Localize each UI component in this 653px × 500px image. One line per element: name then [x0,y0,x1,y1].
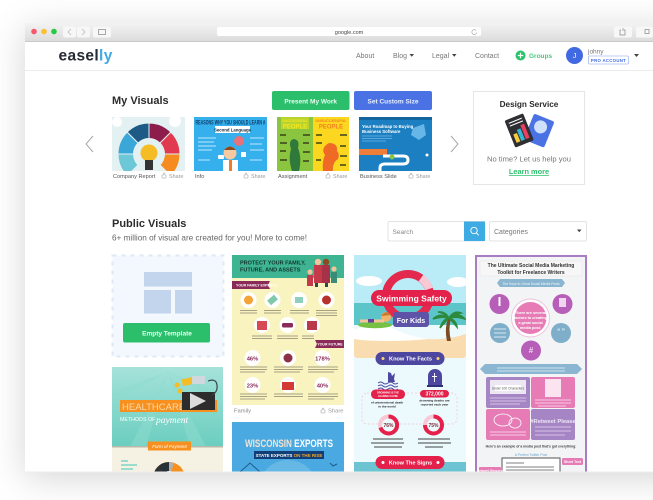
card: Family: 23% [247,384,258,390]
card: Empty Template: Empty Template [142,330,192,338]
card: Healthcare: HEALTHCARE [122,402,185,413]
subtitle: 6+ million of visual are created for you! More to come! [112,234,307,242]
button: Set Custom Size [354,91,432,110]
icon: design cards [504,113,555,148]
thumbnail: Info: Info [195,174,204,180]
search box: Search [392,229,413,236]
panel: Design Service [474,92,584,184]
card: Social Media Marketing Toolkit: Here's an example of a media post that's got everything: [486,444,576,448]
navigation bar [25,42,653,71]
card: Social Media Marketing Toolkit [475,255,587,478]
logo: easelly [58,48,113,64]
navigation bar: PRO ACCOUNT [591,58,626,63]
thumbnail: Assignment [277,117,349,180]
swimmer [358,312,392,328]
arrow: carousel left [86,136,93,152]
thumbnail: Assignment: PEOPLE [319,124,343,130]
card: Social Media Marketing Toolkit: Short Text [564,460,582,464]
navigation bar: J [573,53,576,60]
card: Social Media Marketing Toolkit: Retweet Request [477,469,504,473]
card: Family: Share [328,408,343,414]
card: Family: YOUR FAMILY EXPERTS [236,284,278,288]
card: Healthcare: METHODS OF [120,417,156,423]
card: Swimming Safety: 75% [428,423,439,429]
card: Social Media Marketing Toolkit: A Perfect Twitter Post [515,453,547,457]
card: Empty Template [112,256,224,356]
card: Swimming Safety: LEADING CAUSE [378,395,398,398]
thumbnail: Assignment: UNSUCCESSFUL [315,119,347,123]
card: Family: 46% [247,356,258,362]
card: Social Media Marketing Toolkit: #Retweet Please [530,419,576,425]
card: Swimming Safety: For Kids [397,318,425,325]
card: Wisconsin Exports: WISCONSIN EXPORTS [245,438,333,450]
card: Family [232,255,344,414]
card: Social Media Marketing Toolkit: Under 100 Characters [492,387,525,391]
card: Social Media Marketing Toolkit: media post: [520,326,541,330]
card: Swimming Safety: in the world [378,404,396,408]
card: Family: FUTURE, AND ASSETS [240,268,301,274]
thumbnail: Business Slide: Business Slide [360,174,397,180]
categories dropdown [490,222,586,241]
thumbnail: Info [194,117,267,180]
thumbnail: Assignment: SUCCESSFUL [282,119,309,123]
thumbnail: Company Report [112,115,185,180]
card: Wisconsin Exports: STATE EXPORTS ON THE RISE [256,453,322,458]
card: Swimming Safety: Swimming Safety [376,294,447,304]
heading: My Visuals: My Visuals [112,95,169,107]
arrow: carousel right [451,136,458,152]
card: Family: Family [234,408,251,414]
card: Social Media Marketing Toolkit: The Keys to Great Social Media Posts [502,282,560,286]
search box [388,222,485,241]
card: Social Media Marketing Toolkit: The Ultimate Social Media Marketing [488,263,574,269]
navigation bar: About [356,53,374,60]
thumbnail: Info: REASONS WHY YOU SHOULD LEARN A [196,120,266,126]
card: Healthcare: payment [155,416,189,426]
thumbnail: Company Report: Company Report [113,174,156,180]
navigation bar: Groups [529,53,552,60]
thumbnail: Business Slide: Share [416,174,430,180]
browser title bar: google.com [335,30,364,36]
navigation bar: Blog [393,53,407,60]
thumbnail: Info: Second Language [214,128,252,132]
thumbnail: Business Slide: Business Software [362,129,401,134]
card: Swimming Safety: 372,000 [425,392,444,398]
card: Healthcare [112,367,223,472]
card: Swimming Safety: Know The Signs [389,461,432,467]
card: Social Media Marketing Toolkit: There are several [515,311,546,315]
thumbnail: Business Slide: Your Roadmap to Buying [362,124,414,129]
card: Swimming Safety [354,255,469,472]
palm tree [433,312,465,341]
card: Swimming Safety: reported each year [421,402,449,406]
heading: Public Visuals: Public Visuals [112,218,186,230]
card: Swimming Safety: DROWNING IS THE [377,392,399,395]
family illustration [307,259,337,287]
browser title bar [25,23,653,42]
panel: Design Service: Learn more [509,167,549,176]
button: Present My Work [272,91,350,110]
thumbnail: Info: Share [251,174,265,180]
card: Swimming Safety: Know The Facts [389,357,432,363]
navigation bar: johny [587,48,604,56]
thumbnail: Business Slide [359,117,432,180]
thumbnail: Assignment: Assignment [278,174,308,180]
card: Family: 178% [315,356,330,362]
panel: Design Service: No time? Let us help you [487,154,571,164]
card: Family: PROTECT YOUR FAMILY, [240,260,306,266]
card: Family: YOUR FUTURE [317,342,343,346]
card: Family: 40% [317,384,328,390]
navigation bar: Legal [432,53,450,60]
life ring [386,274,430,318]
card: Swimming Safety: drowning deaths are [419,398,450,402]
thumbnail: Assignment: Share [333,174,347,180]
button: Present My Work: Present My Work [284,98,337,105]
card: Social Media Marketing Toolkit: Toolkit for Freelance Writers [497,270,565,276]
card: Wisconsin Exports [232,422,344,472]
card: Swimming Safety: 76% [383,423,394,429]
thumbnail: Company Report: Share [169,174,183,180]
card: Swimming Safety: of unintentional death [371,400,403,404]
window bottom edge [25,472,653,473]
button: Set Custom Size: Set Custom Size [368,98,419,105]
categories dropdown: Categories [494,229,528,236]
card: Social Media Marketing Toolkit: # [529,346,534,355]
card: Social Media Marketing Toolkit: factors to creating [514,316,548,320]
thumbnail: Assignment: PEOPLE [283,124,307,130]
panel: Design Service: Design Service [500,100,559,109]
card: Healthcare: Form of Payment [152,444,188,449]
navigation bar: Contact [475,53,499,60]
card: Social Media Marketing Toolkit: “ ” [557,329,565,335]
card: Social Media Marketing Toolkit: a great social [518,321,543,325]
